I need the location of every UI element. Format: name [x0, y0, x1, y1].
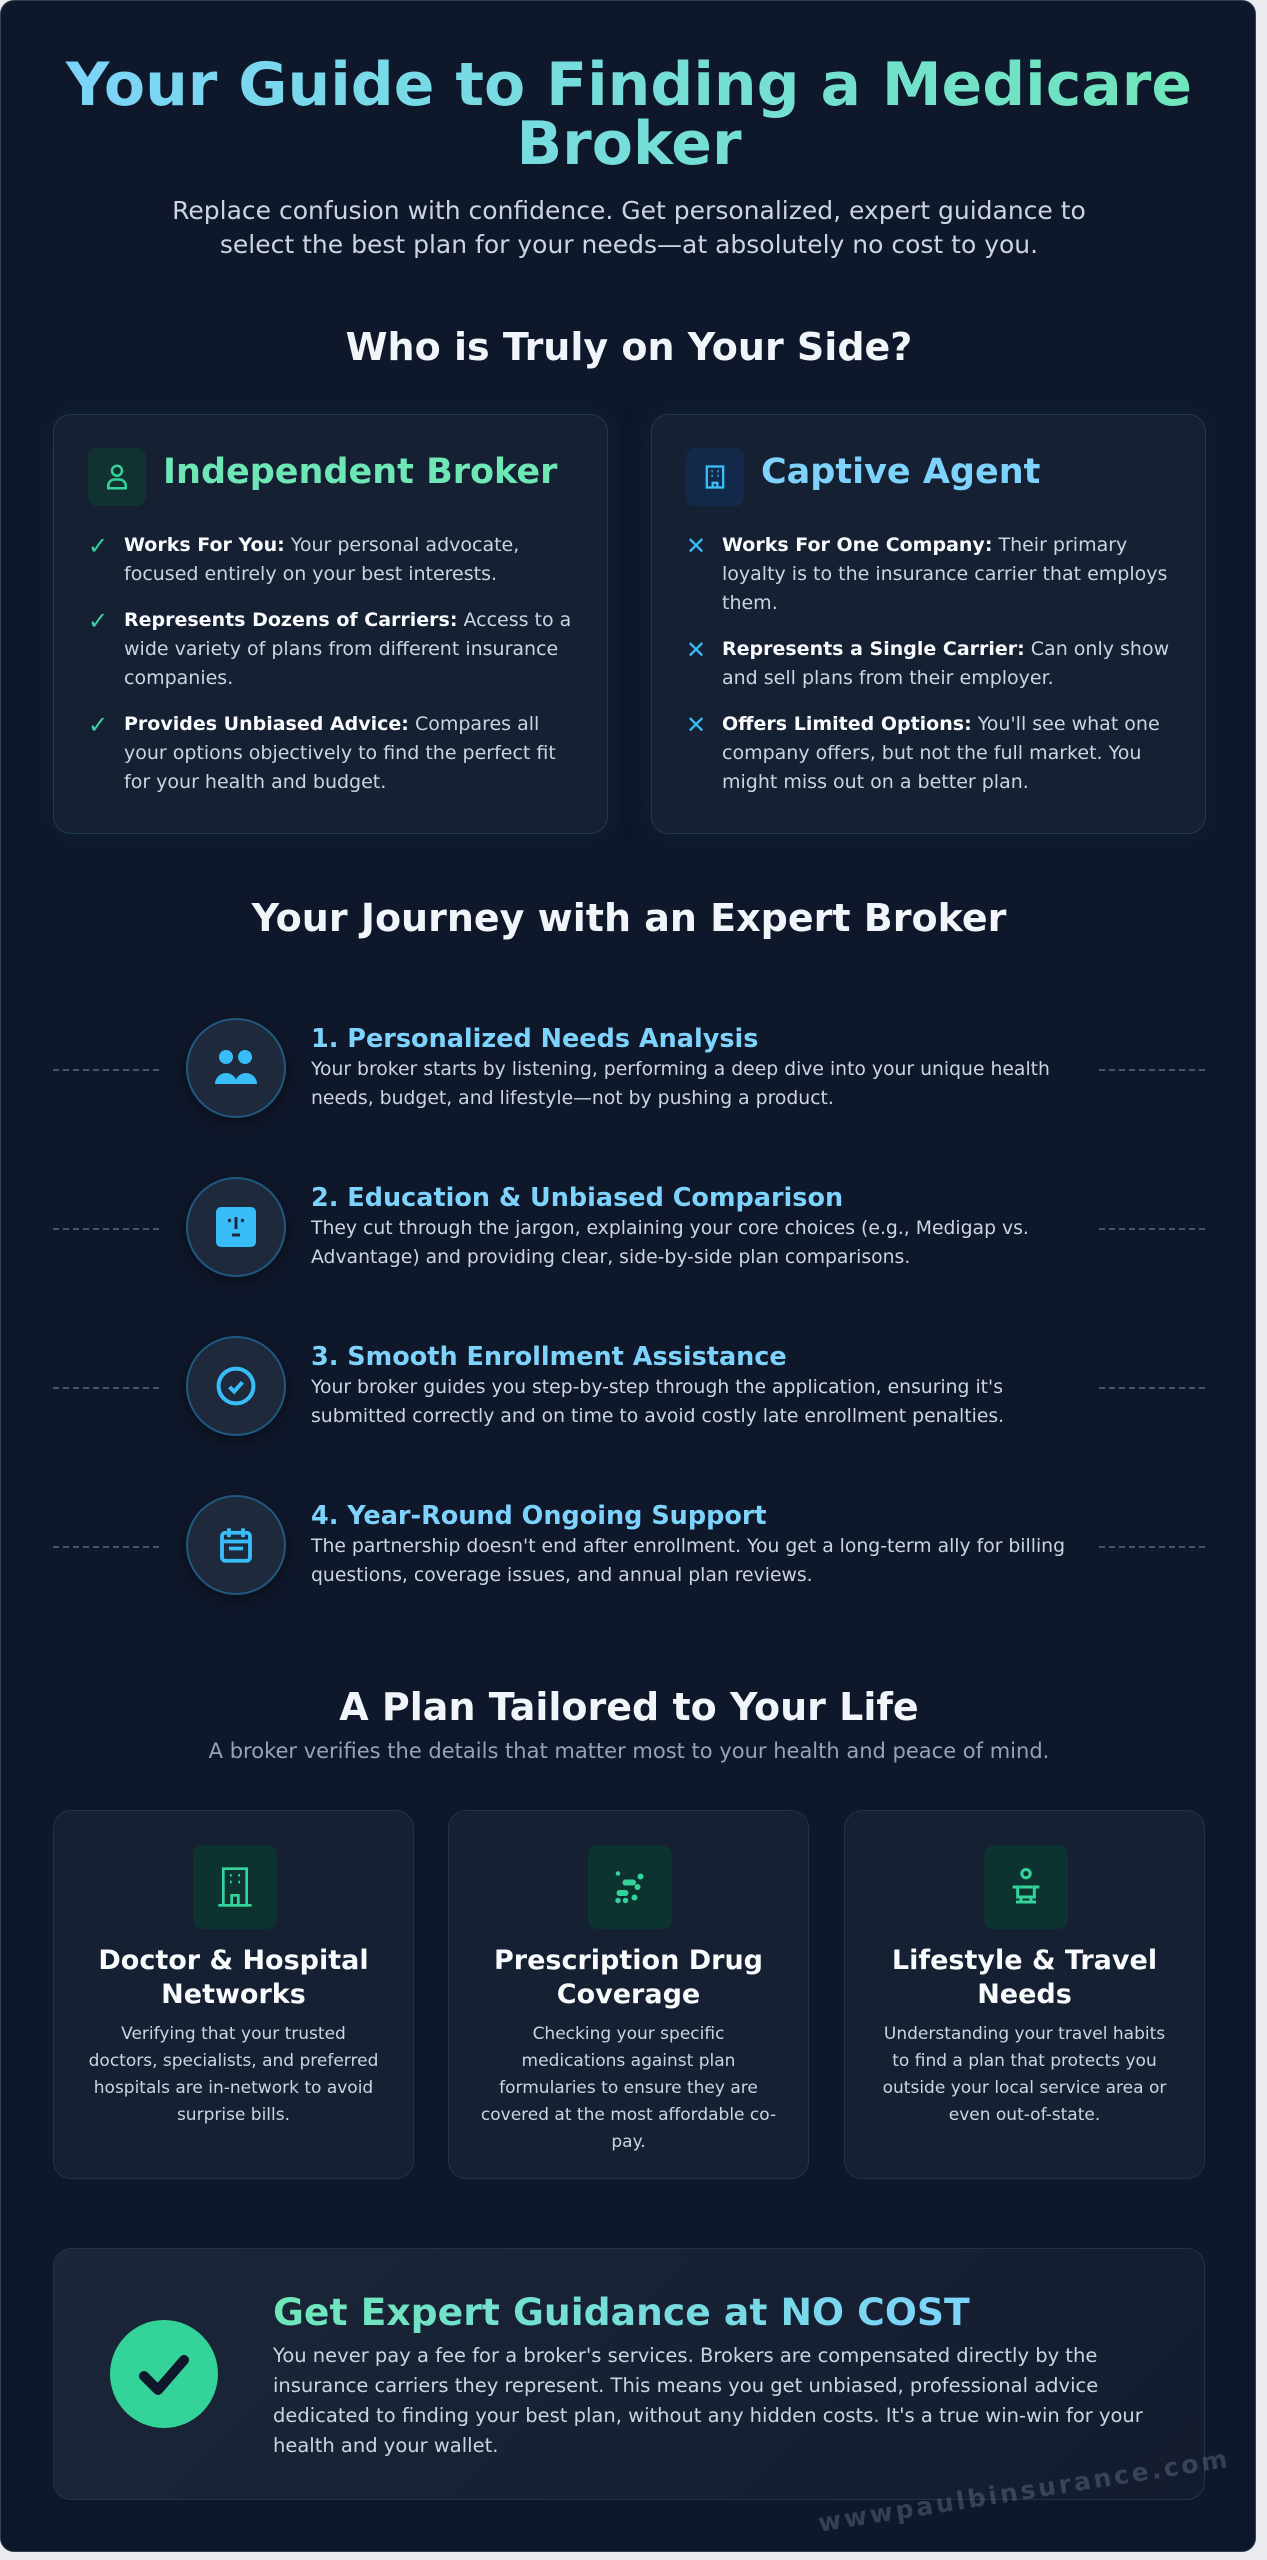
callout: no cost [53, 2248, 1205, 2500]
heading: captive agent: Captive Agent [761, 452, 1040, 492]
title: Your Guide to Finding a Medicare [66, 50, 1192, 120]
step 1 [53, 1018, 1205, 1122]
item 3: Offers Limited Options: You'll see what one company offers, but not the full market. You might miss out on a better plan. [722, 713, 1160, 793]
panel: independent broker: ✓ [88, 607, 108, 635]
item 1: Works For You: Your personal advocate, focused entirely on your best interests. [124, 534, 519, 585]
item 1: Works For One Company: Their primary loyalty is to the insurance carrier that employs them. [722, 534, 1167, 614]
panel: independent broker [53, 414, 608, 834]
card title: Doctor & Hospital Networks [98, 1945, 369, 2010]
step title: 3. Smooth Enrollment Assistance [311, 1342, 787, 1372]
subtitle: Replace confusion with confidence. Get personalized, expert guidance to select the best plan for your needs—at absolutely no cost to you. [172, 196, 1086, 259]
callout heading: Get Expert Guidance at NO COST [273, 2290, 970, 2334]
panel: captive agent [651, 414, 1206, 834]
item 2: Represents Dozens of Carriers: Access to a wide variety of plans from different insurance companies. [124, 609, 571, 689]
icon: hospital [193, 1845, 277, 1929]
title [1, 56, 1257, 174]
icon: people [186, 1018, 286, 1118]
heading: plan tailored: A Plan Tailored to Your Life [339, 1685, 919, 1729]
icon: check circle [186, 1336, 286, 1436]
item 2: Represents a Single Carrier: Can only show and sell plans from their employer. [722, 638, 1169, 689]
panel: independent broker: ✓ [88, 532, 108, 560]
heading: journey: Your Journey with an Expert Broker [252, 896, 1006, 940]
card text: Understanding your travel habits to find a plan that protects you outside your local service area or even out-of-state. [883, 2024, 1166, 2125]
card title: Lifestyle & Travel Needs [892, 1945, 1157, 2010]
panel: captive agent: ✕ [686, 636, 706, 664]
callout text: You never pay a fee for a broker's services. Brokers are compensated directly by the insurance carriers they represent. This means you get unbiased, professional advice dedicated to finding your best plan, without any hidden costs. It's a true win-win for your health and your wallet. [273, 2344, 1143, 2457]
icon: building [686, 448, 744, 506]
step title: 2. Education & Unbiased Comparison [311, 1183, 843, 1213]
step 4 [53, 1495, 1205, 1599]
subheading: A broker verifies the details that matter most to your health and peace of mind. [209, 1739, 1049, 1763]
step 3 [53, 1336, 1205, 1440]
panel: captive agent: ✕ [686, 532, 706, 560]
watermark: wwwpaulbinsurance.com [816, 2444, 1232, 2538]
panel: captive agent: ✕ [686, 711, 706, 739]
icon: comparison [186, 1177, 286, 1277]
step text: They cut through the jargon, explaining your core choices (e.g., Medigap vs. Advantage) and providing clear, side-by-side plan comparisons. [311, 1218, 1029, 1268]
icon: calendar [186, 1495, 286, 1595]
icon: pills [588, 1845, 672, 1929]
title: Broker [516, 109, 742, 179]
step text: The partnership doesn't end after enrollment. You get a long-term ally for billing questions, coverage issues, and annual plan reviews. [311, 1536, 1065, 1586]
panel: independent broker: ✓ [88, 711, 108, 739]
card text: Verifying that your trusted doctors, specialists, and preferred hospitals are in-network to avoid surprise bills. [89, 2024, 378, 2125]
step text: Your broker starts by listening, performing a deep dive into your unique health needs, budget, and lifestyle—not by pushing a product. [311, 1059, 1050, 1109]
card title: Prescription Drug Coverage [494, 1945, 763, 2010]
step text: Your broker guides you step-by-step through the application, ensuring it's submitted correctly and on time to avoid costly late enrollment penalties. [311, 1377, 1004, 1427]
heading: who is on your side: Who is Truly on Your Side? [346, 325, 912, 369]
heading: independent broker: Independent Broker [163, 452, 557, 492]
panel: lifestyle [844, 1810, 1205, 2179]
item 3: Provides Unbiased Advice: Compares all your options objectively to find the perfect fit for your health and budget. [124, 713, 556, 793]
card text: Checking your specific medications against plan formularies to ensure they are covered at the most affordable co-pay. [481, 2024, 776, 2152]
icon: check [110, 2320, 218, 2428]
step title: 1. Personalized Needs Analysis [311, 1024, 758, 1054]
icon: traveler [984, 1845, 1068, 1929]
step title: 4. Year-Round Ongoing Support [311, 1501, 767, 1531]
panel: prescription [448, 1810, 809, 2179]
step 2 [53, 1177, 1205, 1281]
icon: person [88, 448, 146, 506]
panel: doctor networks [53, 1810, 414, 2179]
